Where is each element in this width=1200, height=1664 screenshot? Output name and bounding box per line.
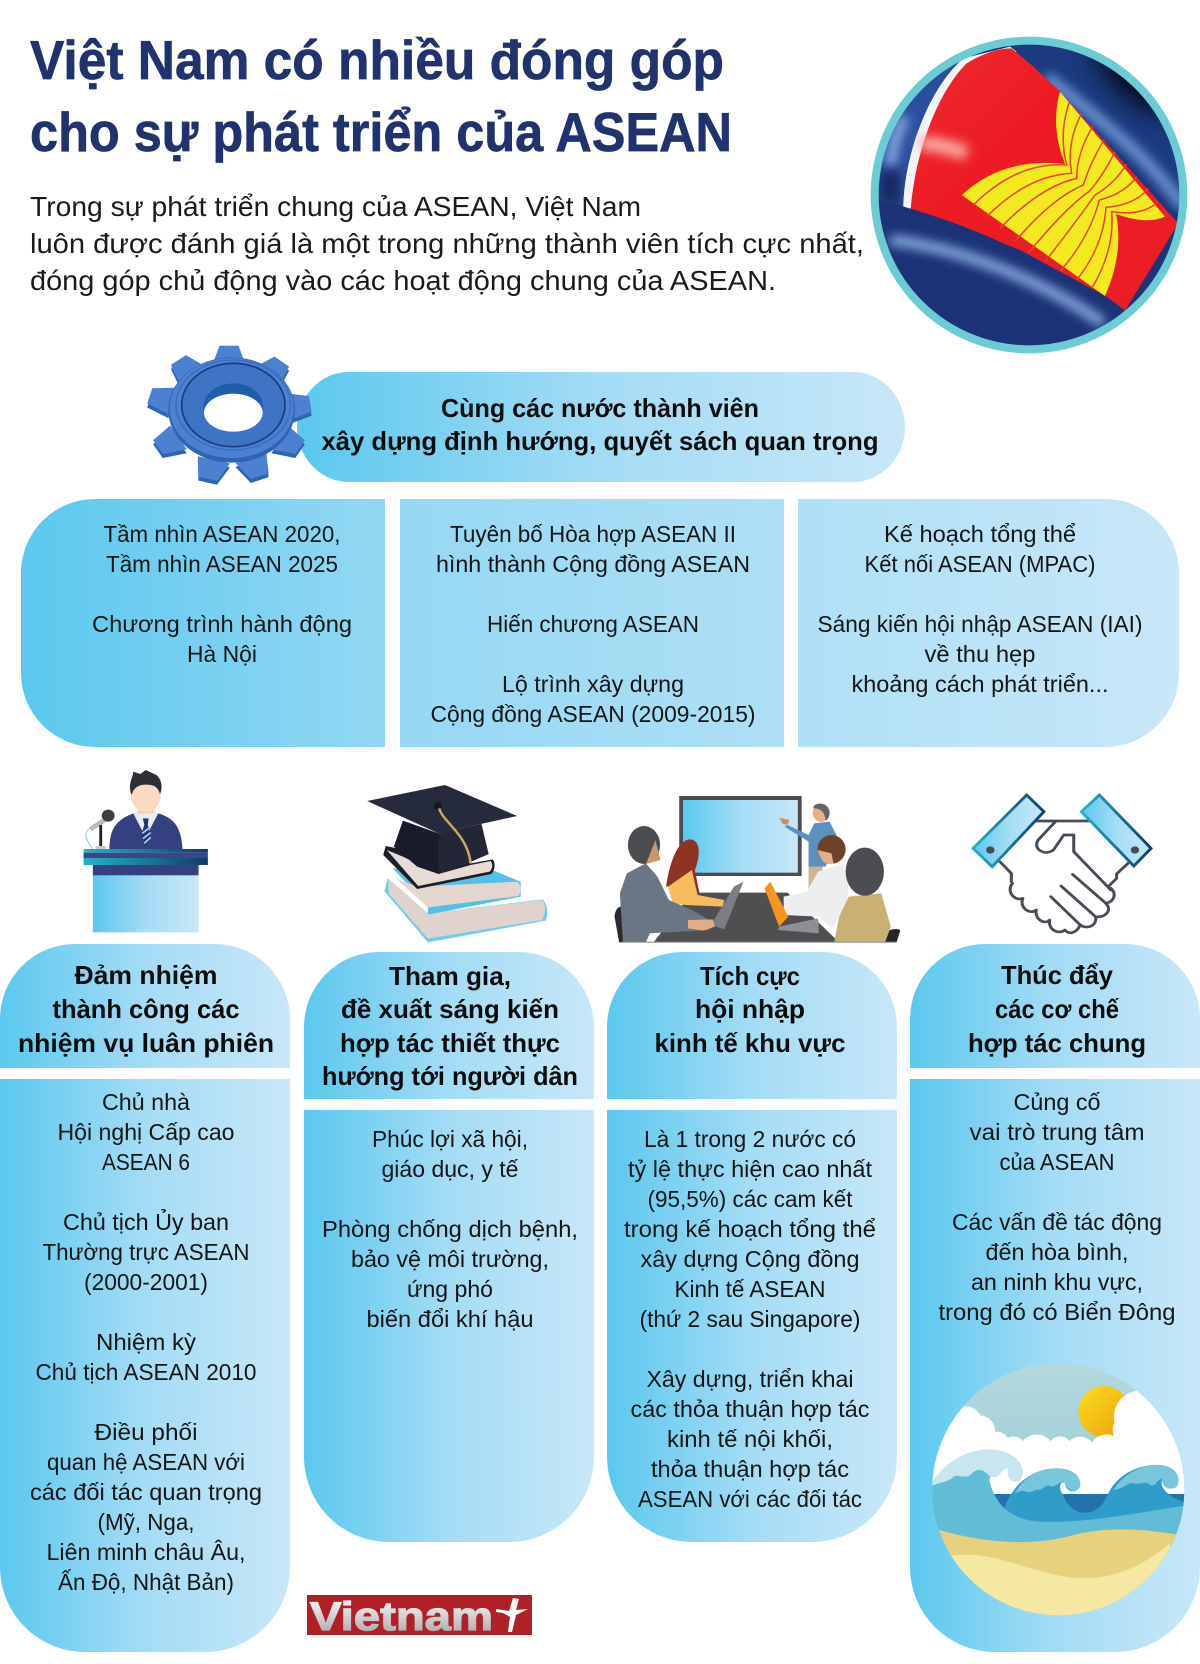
column 2 heading: hướng tới người dân bbox=[322, 1061, 578, 1091]
intro text: luôn được đánh giá là một trong những thành viên tích cực nhất, bbox=[30, 228, 864, 259]
column 2 body: biến đổi khí hậu bbox=[366, 1306, 534, 1332]
panel: column 2 initiatives bbox=[304, 952, 594, 1542]
column 1 body bbox=[0, 1079, 290, 1652]
column 2 heading: hợp tác thiết thực bbox=[340, 1028, 560, 1058]
column 2 heading: Tham gia, bbox=[389, 961, 511, 991]
column 1 body: các đối tác quan trọng bbox=[30, 1479, 262, 1505]
column 4 heading: hợp tác chung bbox=[968, 1028, 1146, 1058]
column 4 body: trong đó có Biển Đông bbox=[938, 1299, 1176, 1325]
column 3 body: ASEAN với các đối tác bbox=[638, 1486, 862, 1512]
panel: vision: Chương trình hành động bbox=[92, 611, 352, 637]
column 1 body: Ấn Độ, Nhật Bản) bbox=[58, 1568, 234, 1595]
column 1 body: Chủ nhà bbox=[102, 1089, 191, 1115]
heading pill: xây dựng định hướng, quyết sách quan trọng bbox=[322, 426, 878, 456]
panel: column 1 rotating duties bbox=[0, 944, 290, 1652]
column 3 body bbox=[607, 1110, 897, 1542]
column 4 body bbox=[910, 1079, 1200, 1652]
icon: blue gear bbox=[145, 346, 313, 486]
column 3 body: (95,5%) các cam kết bbox=[648, 1186, 853, 1212]
column 4 body: an ninh khu vực, bbox=[971, 1269, 1143, 1295]
column 1 body: Nhiệm kỳ bbox=[96, 1329, 196, 1355]
panel: vision bbox=[21, 499, 385, 747]
column 1 heading: nhiệm vụ luân phiên bbox=[18, 1028, 274, 1058]
column 4 body: đến hòa bình, bbox=[986, 1239, 1128, 1265]
column 3 body: (thứ 2 sau Singapore) bbox=[640, 1306, 860, 1332]
panel: charter: Cộng đồng ASEAN (2009-2015) bbox=[430, 701, 756, 727]
icon: ASEAN flag bbox=[870, 37, 1190, 353]
panel: connectivity: Sáng kiến hội nhập ASEAN (IAI) bbox=[818, 611, 1142, 637]
column 2 heading bbox=[304, 952, 594, 1099]
panel: charter: Tuyên bố Hòa hợp ASEAN II bbox=[450, 521, 736, 547]
column 3 body: Là 1 trong 2 nước có bbox=[644, 1126, 856, 1152]
column 4 heading: các cơ chế bbox=[995, 994, 1119, 1024]
column 3 body: trong kế hoạch tổng thể bbox=[624, 1216, 876, 1242]
column 3 heading bbox=[607, 952, 897, 1099]
column 1 body: quan hệ ASEAN với bbox=[47, 1449, 245, 1475]
column 1 body: Liên minh châu Âu, bbox=[46, 1539, 246, 1565]
column 2 body: Phòng chống dịch bệnh, bbox=[322, 1216, 578, 1242]
title: Việt Nam có nhiều đóng góp bbox=[30, 29, 724, 91]
icon: meeting presentation bbox=[615, 796, 900, 943]
column 4 body: vai trò trung tâm bbox=[970, 1119, 1144, 1145]
logo: Vietnam+: Vietnam bbox=[310, 1595, 493, 1639]
column 3 body: thỏa thuận hợp tác bbox=[651, 1456, 849, 1482]
column 3 heading: Tích cực bbox=[700, 961, 800, 991]
panel: vision: Tầm nhìn ASEAN 2020, bbox=[104, 521, 340, 547]
column 1 body: Điều phối bbox=[94, 1419, 198, 1445]
icon: sea waves illustration bbox=[930, 1360, 1190, 1620]
column 3 body: Kinh tế ASEAN bbox=[674, 1276, 826, 1302]
column 3 heading: hội nhập bbox=[695, 994, 805, 1024]
title bbox=[30, 29, 732, 163]
column 4 body: Các vấn đề tác động bbox=[952, 1209, 1162, 1235]
panel: charter: hình thành Cộng đồng ASEAN bbox=[436, 551, 750, 577]
heading pill: Cùng các nước thành viên bbox=[441, 393, 759, 423]
column 1 body: Chủ tịch ASEAN 2010 bbox=[36, 1359, 256, 1385]
icon: speaker at podium bbox=[84, 770, 208, 932]
column 1 heading: Đảm nhiệm bbox=[74, 960, 218, 990]
column 2 body: Phúc lợi xã hội, bbox=[372, 1126, 528, 1152]
column 1 body: (Mỹ, Nga, bbox=[98, 1509, 194, 1535]
panel: connectivity bbox=[798, 499, 1179, 747]
column 2 body: giáo dục, y tế bbox=[382, 1156, 518, 1182]
logo: Vietnam+ bbox=[307, 1595, 532, 1639]
column 1 heading bbox=[0, 944, 290, 1068]
intro text: đóng góp chủ động vào các hoạt động chung của ASEAN. bbox=[30, 265, 776, 296]
column 1 body: ASEAN 6 bbox=[102, 1149, 190, 1175]
column 1 body: Thường trực ASEAN bbox=[42, 1239, 250, 1265]
column 2 body bbox=[304, 1110, 594, 1542]
panel: connectivity: Kết nối ASEAN (MPAC) bbox=[864, 551, 1096, 577]
title: cho sự phát triển của ASEAN bbox=[30, 101, 732, 163]
panel: column 3 economic integration bbox=[607, 952, 897, 1542]
icon: graduation cap on books bbox=[367, 785, 547, 942]
intro text: Trong sự phát triển chung của ASEAN, Việt Nam bbox=[30, 191, 641, 222]
intro text bbox=[30, 191, 864, 296]
column 3 body: Xây dựng, triển khai bbox=[646, 1366, 854, 1392]
panel: charter: Hiến chương ASEAN bbox=[487, 611, 699, 637]
icon: handshake bbox=[973, 795, 1151, 933]
panel: connectivity: khoảng cách phát triển... bbox=[852, 671, 1108, 697]
column 3 body: kinh tế nội khối, bbox=[667, 1426, 833, 1452]
panel: three programs band bbox=[21, 499, 1179, 747]
column 3 body: các thỏa thuận hợp tác bbox=[630, 1396, 870, 1422]
column 3 body: tỷ lệ thực hiện cao nhất bbox=[628, 1156, 872, 1182]
column 4 heading: Thúc đẩy bbox=[1001, 960, 1114, 990]
column 3 heading: kinh tế khu vực bbox=[654, 1028, 846, 1058]
column 4 heading bbox=[910, 944, 1200, 1068]
column 1 heading: thành công các bbox=[52, 994, 240, 1024]
column 2 heading: đề xuất sáng kiến bbox=[341, 994, 559, 1024]
panel: vision: Tầm nhìn ASEAN 2025 bbox=[106, 551, 338, 577]
column 4 body: của ASEAN bbox=[1000, 1149, 1114, 1175]
panel: connectivity: Kế hoạch tổng thể bbox=[884, 521, 1076, 547]
panel: charter: Lộ trình xây dựng bbox=[502, 671, 684, 697]
panel: charter bbox=[400, 499, 784, 747]
column 1 body: Hội nghị Cấp cao bbox=[58, 1119, 234, 1145]
column 3 body: xây dựng Cộng đồng bbox=[640, 1246, 860, 1272]
panel: column 4 cooperation mechanisms bbox=[910, 944, 1200, 1652]
column 1 body: (2000-2001) bbox=[84, 1269, 208, 1295]
panel: connectivity: về thu hẹp bbox=[924, 641, 1036, 667]
column 2 body: ứng phó bbox=[407, 1276, 493, 1302]
column 2 body: bảo vệ môi trường, bbox=[351, 1246, 549, 1272]
panel: vision: Hà Nội bbox=[187, 641, 257, 667]
column 4 body: Củng cố bbox=[1014, 1089, 1100, 1115]
column 1 body: Chủ tịch Ủy ban bbox=[63, 1207, 229, 1235]
heading pill bbox=[297, 372, 905, 482]
